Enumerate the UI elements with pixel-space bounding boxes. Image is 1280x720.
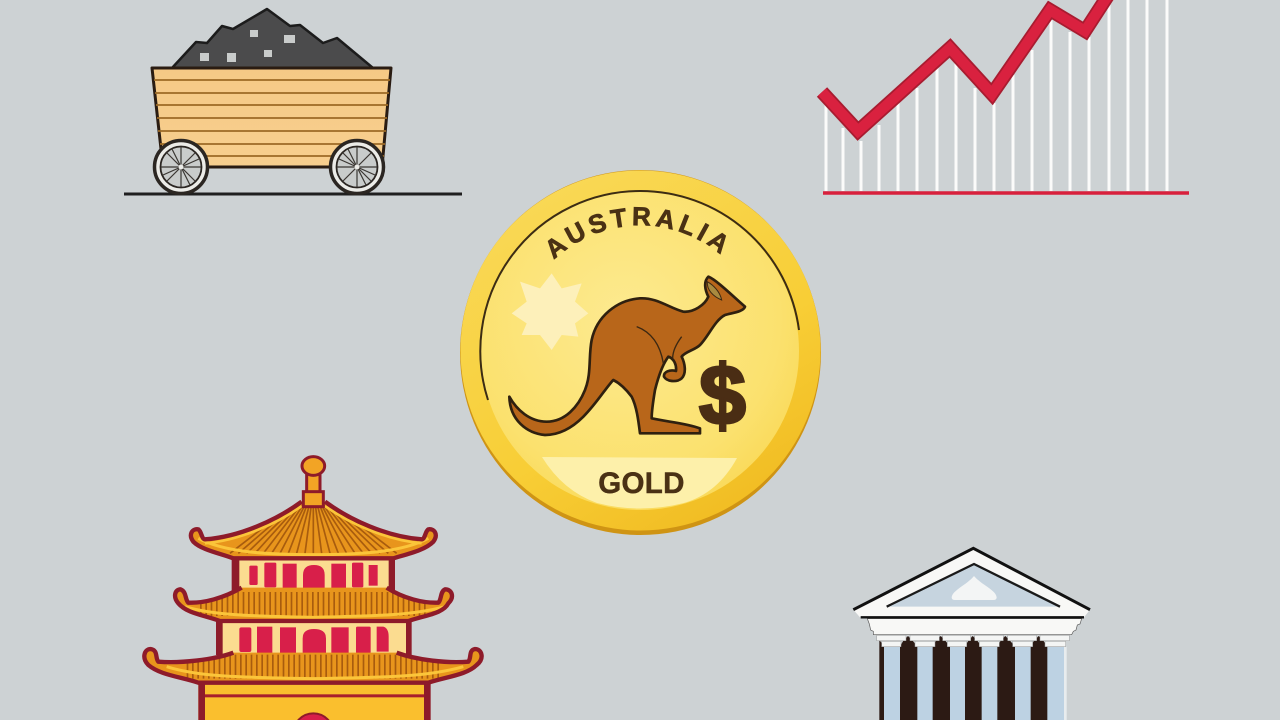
kangaroo — [509, 277, 745, 435]
cart body — [152, 68, 391, 167]
capitals — [877, 635, 1069, 647]
bottom roof — [144, 649, 482, 683]
ore pile — [172, 9, 373, 68]
gold banner — [542, 457, 737, 508]
pagoda base wall — [198, 678, 431, 720]
star — [512, 273, 588, 350]
coin face — [481, 192, 799, 510]
coin text: GOLD: GOLD — [598, 467, 685, 500]
upper gallery — [232, 555, 395, 592]
chart: rising price line with bars — [822, 0, 1189, 193]
lower gallery — [216, 618, 412, 655]
right wheel — [330, 140, 384, 194]
entablature — [867, 619, 1082, 635]
middle roof — [175, 588, 452, 621]
dollar sign: $ — [699, 348, 746, 442]
coin: Australia gold — [460, 170, 821, 535]
pediment — [853, 548, 1090, 617]
cart planks — [154, 80, 390, 156]
baseline — [823, 191, 1189, 195]
icon: bank building — [853, 548, 1090, 720]
white bars — [826, 0, 1167, 191]
coin rim — [460, 170, 821, 535]
ore nuggets — [200, 30, 295, 62]
ground line — [124, 192, 462, 196]
price line — [822, 0, 1109, 131]
columns and dark gaps — [879, 636, 1067, 720]
inner arc — [480, 191, 799, 400]
left wheel — [154, 140, 208, 194]
icon: mine cart — [124, 9, 462, 194]
coin text: AUSTRALIA: AUSTRALIA — [548, 206, 726, 260]
top roof — [191, 502, 436, 558]
icon: pagoda — [144, 457, 482, 720]
finial — [302, 457, 325, 507]
